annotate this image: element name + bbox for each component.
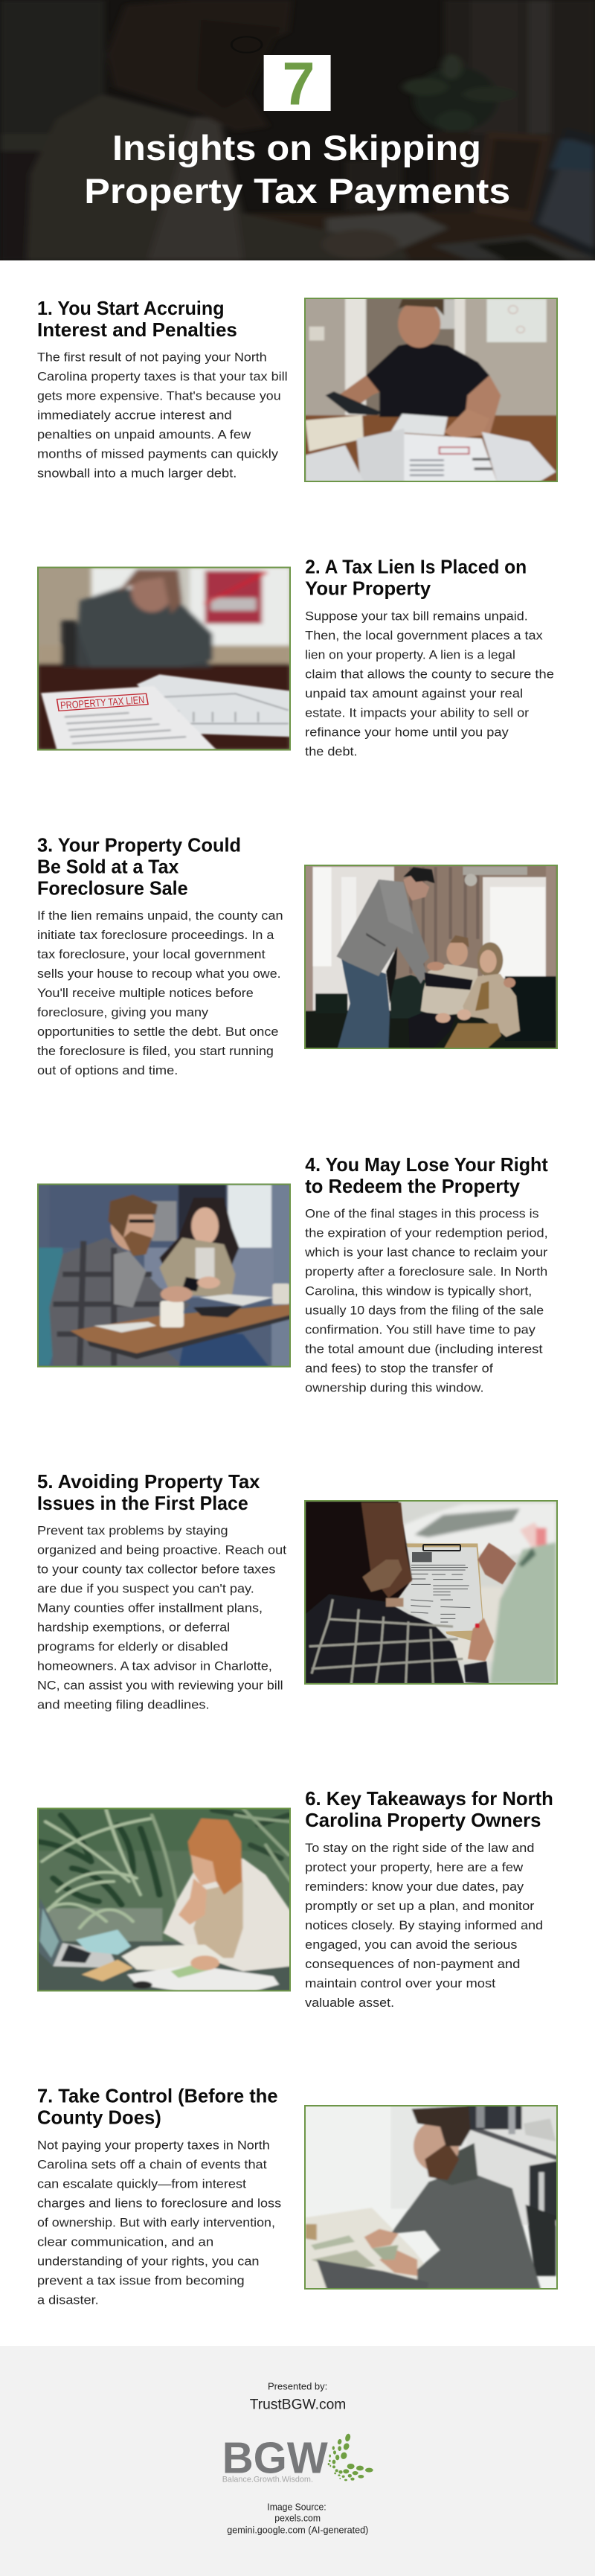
body text 5: programs for elderly or disabled [37, 1640, 228, 1653]
heading 3 [37, 834, 241, 900]
body text 2: claim that allows the county to secure the [305, 667, 554, 682]
icon: leaf dots [328, 2433, 373, 2481]
heading 2 [305, 555, 527, 600]
heading 5: 5. Avoiding Property Tax [37, 1470, 260, 1493]
photo: couple reviewing finances at table [37, 1184, 291, 1369]
heading 4: to Redeem the Property [305, 1175, 521, 1197]
body text 7: a disaster. [37, 2293, 99, 2307]
heading 7 [37, 2085, 278, 2128]
body text 3: You'll receive multiple notices before [37, 986, 254, 1000]
body text 6: notices closely. By staying informed and [305, 1918, 543, 1932]
header photo: woman at a desk, darkened [0, 0, 595, 260]
image source credits [227, 2502, 368, 2536]
heading 6: 6. Key Takeaways for North [305, 1787, 553, 1810]
body text 4: Carolina, this window is typically short, [305, 1284, 532, 1298]
number badge [264, 51, 331, 118]
body text 4: the expiration of your redemption period, [305, 1226, 548, 1240]
body text 2 [305, 609, 554, 759]
heading 1: 1. You Start Accruing [37, 297, 225, 319]
heading 1 [37, 297, 237, 341]
heading 6: Carolina Property Owners [305, 1809, 541, 1831]
body text 7: prevent a tax issue from becoming [37, 2273, 245, 2287]
panel: section 4 [37, 1153, 548, 1395]
body text 1: The first result of not paying your North [37, 350, 267, 364]
body text 4: One of the final stages in this process is [305, 1207, 538, 1221]
body text 3: opportunities to settle the debt. But once [37, 1025, 278, 1039]
body text 5 [37, 1524, 286, 1711]
panel: section 7 [37, 2085, 558, 2307]
body text 7: can escalate quickly—from interest [37, 2176, 246, 2191]
body text 4: and fees) to stop the transfer of [305, 1362, 493, 1376]
heading 1: Interest and Penalties [37, 318, 237, 341]
header banner [0, 0, 595, 260]
logo: BGW: BGW [222, 2432, 329, 2482]
heading 7: County Does) [37, 2106, 161, 2128]
number badge: 7 [283, 51, 315, 118]
body text 3: the foreclosure is filed, you start running [37, 1044, 274, 1058]
heading 5 [37, 1470, 260, 1514]
body text 5: Many counties offer installment plans, [37, 1601, 263, 1615]
logo: BGW [222, 2432, 373, 2484]
body text 7 [37, 2138, 281, 2307]
body text 6: engaged, you can avoid the serious [305, 1938, 517, 1952]
body text 6 [305, 1841, 543, 2010]
body text 6: protect your property, here are a few [305, 1860, 524, 1874]
body text 1: months of missed payments can quickly [37, 446, 279, 461]
body text 5: and meeting filing deadlines. [37, 1698, 210, 1711]
heading 3: Be Sold at a Tax [37, 856, 179, 878]
footer panel [0, 2346, 595, 2576]
heading 7: 7. Take Control (Before the [37, 2085, 278, 2107]
body text 4: property after a foreclosure sale. In North [305, 1265, 547, 1279]
heading 2: Your Property [305, 577, 431, 600]
body text 7: Not paying your property taxes in North [37, 2138, 270, 2152]
panel: section 5 [37, 1470, 558, 1711]
photo: clipboard being reviewed [304, 1500, 558, 1685]
heading 6 [305, 1787, 553, 1831]
body text 6: reminders: know your due dates, pay [305, 1880, 524, 1894]
body text 1 [37, 350, 288, 480]
body text 5: to your county tax collector before taxes [37, 1563, 275, 1576]
body text 4: usually 10 days from the filing of the sale [305, 1304, 544, 1318]
body text 4 [304, 1207, 548, 1395]
body text 7: clear communication, and an [37, 2234, 213, 2249]
body text 6: consequences of non-payment and [305, 1957, 521, 1971]
title: Insights on Skipping [112, 128, 481, 167]
presented by: Presented by: [268, 2382, 327, 2392]
title: Property Tax Payments [84, 171, 510, 211]
body text 5: hardship exemptions, or deferral [37, 1621, 230, 1634]
body text 1: snowball into a much larger debt. [37, 466, 237, 480]
body text 6: To stay on the right side of the law and [305, 1841, 534, 1855]
photo: stressed man with property tax lien: PROPERTY TAX LIEN [60, 695, 145, 711]
body text 1: immediately accrue interest and [37, 408, 232, 422]
body text 5: organized and being proactive. Reach out [37, 1543, 286, 1557]
heading 5: Issues in the First Place [37, 1492, 248, 1514]
body text 3: If the lien remains unpaid, the county can [37, 909, 283, 923]
body text 1: penalties on unpaid amounts. A few [37, 427, 251, 441]
presented by [250, 2382, 346, 2413]
body text 7: understanding of your rights, you can [37, 2254, 259, 2268]
body text 2: lien on your property. A lien is a legal [305, 647, 515, 662]
body text 3: tax foreclosure, your local government [37, 947, 266, 961]
panel: section 3 [37, 834, 558, 1077]
panel: section 6 [37, 1787, 553, 2010]
heading 3: Foreclosure Sale [37, 877, 188, 900]
body text 4: ownership during this window. [305, 1381, 483, 1395]
body text 7: of ownership. But with early intervention, [37, 2215, 275, 2229]
body text 4: which is your last chance to reclaim your [304, 1246, 548, 1260]
body text 4: the total amount due (including interest [305, 1342, 543, 1356]
body text 3: foreclosure, giving you many [37, 1005, 209, 1019]
body text 2: Suppose your tax bill remains unpaid. [305, 609, 528, 624]
panel: section 1 [37, 297, 558, 482]
photo: advisor with couple on sofa [304, 865, 558, 1049]
heading 4: 4. You May Lose Your Right [305, 1153, 548, 1176]
body text 2: refinance your home until you pay [305, 725, 509, 740]
photo: stressed man with property tax lien [37, 567, 291, 751]
body text 7: charges and liens to foreclosure and loss [37, 2196, 281, 2210]
image source credits: gemini.google.com (AI-generated) [227, 2525, 368, 2536]
body text 2: the debt. [305, 744, 358, 759]
body text 5: Prevent tax problems by staying [37, 1524, 228, 1537]
body text 4: confirmation. You still have time to pay [305, 1323, 536, 1337]
photo: woman with paperwork among palms [37, 1808, 291, 1991]
image source credits: pexels.com [274, 2513, 321, 2524]
body text 2: Then, the local government places a tax [305, 628, 543, 643]
body text 3 [37, 909, 283, 1077]
heading 4 [305, 1153, 548, 1197]
body text 1: gets more expensive. That's because you [37, 388, 281, 403]
body text 6: promptly or set up a plan, and monitor [305, 1899, 535, 1913]
photo: man counting cash at desk [304, 2105, 558, 2290]
image source credits: Image Source: [267, 2502, 327, 2512]
body text 2: estate. It impacts your ability to sell or [305, 705, 530, 720]
body text 1: Carolina property taxes is that your tax bill [37, 369, 288, 383]
body text 5: NC, can assist you with reviewing your bill [37, 1679, 283, 1692]
body text 7: Carolina sets off a chain of events that [37, 2157, 267, 2171]
body text 5: are due if you suspect you can't pay. [37, 1582, 254, 1595]
photo: man reviewing bills [304, 298, 558, 482]
body text 3: initiate tax foreclosure proceedings. In a [37, 928, 274, 942]
body text 3: sells your house to recoup what you owe. [37, 967, 281, 981]
presented by: TrustBGW.com [250, 2397, 346, 2413]
heading 2: 2. A Tax Lien Is Placed on [305, 555, 527, 577]
body text 3: out of options and time. [37, 1063, 178, 1077]
panel: section 2 [37, 555, 554, 759]
body text 6: maintain control over your most [305, 1976, 496, 1990]
body text 6: valuable asset. [305, 1996, 394, 2010]
heading 3: 3. Your Property Could [37, 834, 241, 856]
body text 5: homeowners. A tax advisor in Charlotte, [37, 1659, 272, 1673]
body text 2: unpaid tax amount against your real [305, 686, 523, 701]
logo: BGW: Balance.Growth.Wisdom. [222, 2476, 313, 2484]
title [84, 128, 510, 211]
